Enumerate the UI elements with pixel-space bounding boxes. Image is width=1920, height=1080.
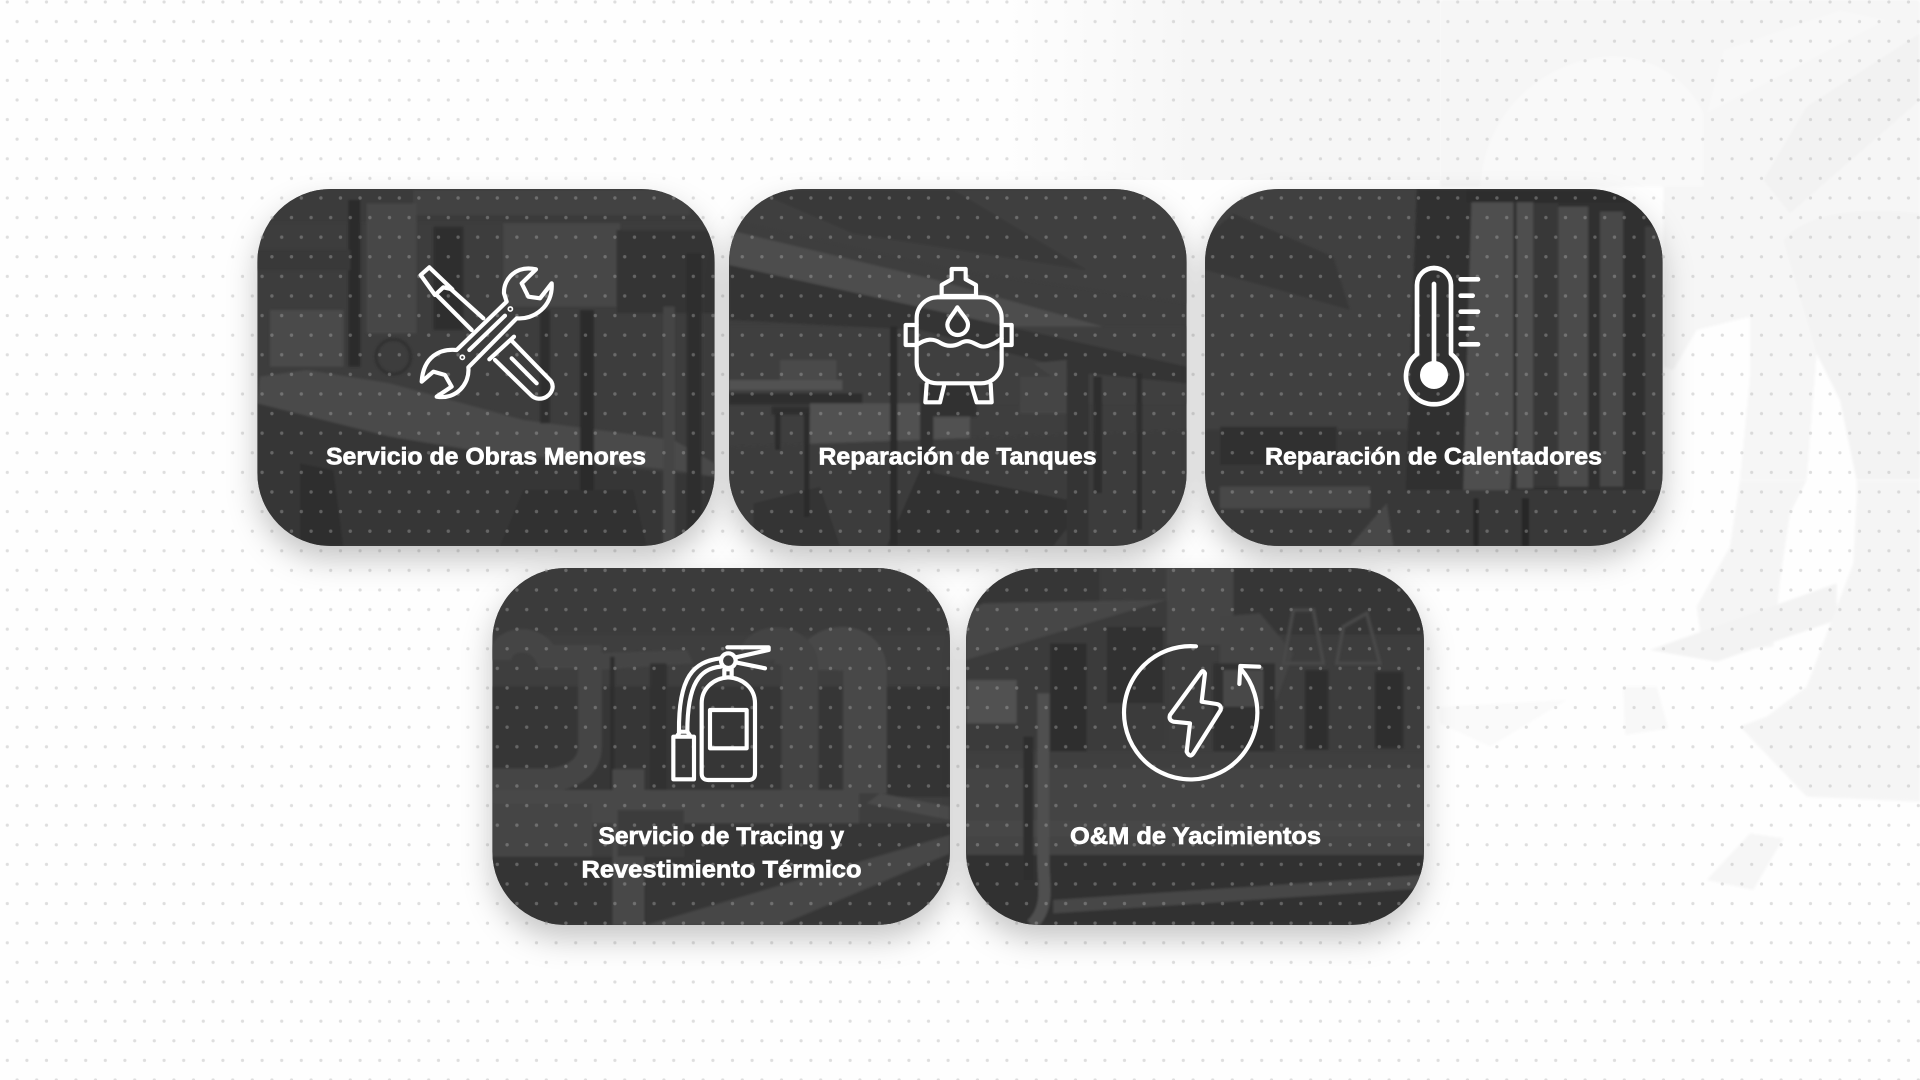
label: two lines: Revestimiento Térmico <box>582 856 862 884</box>
photo: pipe rack <box>729 189 1187 546</box>
label: Servicio de Obras Menores <box>326 444 646 470</box>
icon: lightning bolt in circular arrow <box>1124 646 1259 779</box>
panel: Servicio de Obras Menores <box>257 189 715 560</box>
panel: Reparación de Tanques <box>729 189 1187 560</box>
icon: fire extinguisher <box>673 647 769 780</box>
photo: pipes and valve <box>257 189 715 546</box>
label: Reparación de Calentadores <box>1265 444 1602 470</box>
panel: Reparación de Calentadores <box>1205 189 1663 560</box>
photo: field installation <box>966 568 1424 925</box>
photo: heaters <box>1205 189 1663 546</box>
label: two lines: Servicio de Tracing y <box>598 823 845 850</box>
label: Reparación de Tanques <box>818 444 1096 470</box>
icon: thermometer <box>1406 268 1478 404</box>
label: two lines <box>582 823 862 884</box>
photo: insulated pipes <box>492 568 950 925</box>
background watermark: worker with hammer <box>1000 0 1920 890</box>
panel: Servicio de Tracing y Revestimiento Térmico <box>492 568 950 939</box>
panel: O&M de Yacimientos <box>966 568 1424 939</box>
label: O&M de Yacimientos <box>1070 823 1321 850</box>
icon: screwdriver and wrench <box>421 267 553 399</box>
icon: tank with water drop <box>906 269 1012 402</box>
